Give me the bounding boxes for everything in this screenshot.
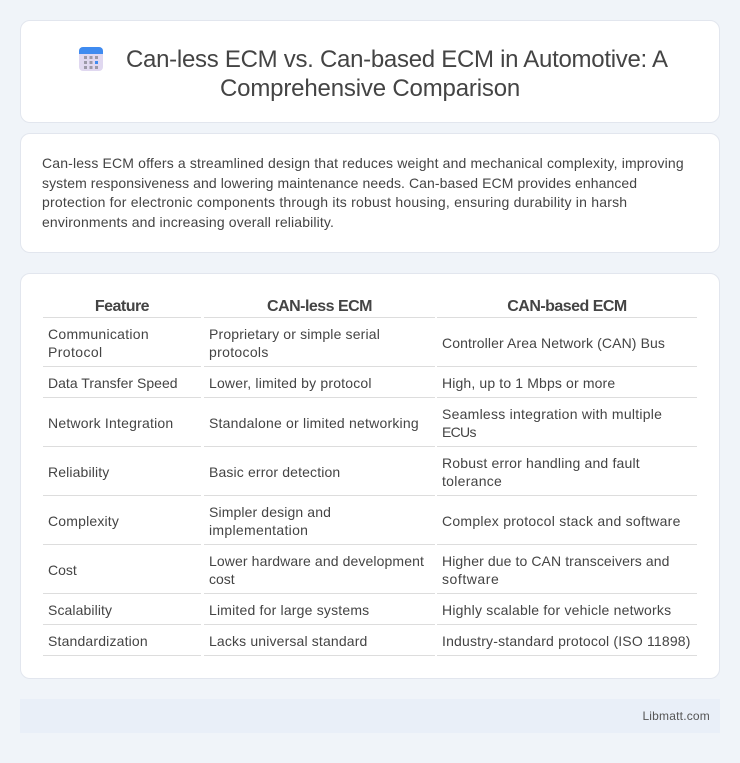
row: communication protocol: protocols xyxy=(209,344,269,360)
header card xyxy=(20,20,720,123)
row: reliability: Robust error handling and fault xyxy=(442,455,640,471)
row: standardization: Industry-standard protocol (ISO 11898) xyxy=(442,633,691,649)
row: scalability xyxy=(48,602,671,618)
row: network integration: Network Integration xyxy=(48,415,173,431)
row: scalability: Highly scalable for vehicle networks xyxy=(442,602,671,618)
footer text: Libmatt.com xyxy=(642,709,710,723)
table header: CAN-less ECM xyxy=(267,298,372,315)
table header: CAN-based ECM xyxy=(507,298,627,315)
row: scalability: Limited for large systems xyxy=(209,602,369,618)
row: scalability: Scalability xyxy=(48,602,112,618)
row: network integration: Standalone or limited networking xyxy=(209,415,419,431)
row: cost: Higher due to CAN transceivers and xyxy=(442,553,670,569)
row: reliability: Basic error detection xyxy=(209,464,340,480)
table header xyxy=(95,298,627,315)
title xyxy=(126,46,668,102)
row: communication protocol: Protocol xyxy=(48,344,103,360)
intro card xyxy=(20,133,720,253)
row: complexity: Simpler design and xyxy=(209,504,331,520)
row: standardization: Lacks universal standard xyxy=(209,633,367,649)
row: communication protocol: Proprietary or simple serial xyxy=(209,326,380,342)
intro text: environments and increasing overall reliability. xyxy=(42,214,334,230)
row: network integration: ECUs xyxy=(442,424,476,440)
row: data transfer speed xyxy=(48,375,615,391)
row: reliability xyxy=(48,455,640,489)
row: reliability: tolerance xyxy=(442,473,502,489)
row: complexity: Complexity xyxy=(48,513,119,529)
intro text: protection for electronic components through its robust housing, ensuring durability in harsh xyxy=(42,194,627,210)
title: Can-less ECM vs. Can-based ECM in Automotive: A xyxy=(126,46,668,73)
intro text: Can-less ECM offers a streamlined design that reduces weight and mechanical complexity, improving xyxy=(42,155,684,171)
row: complexity: implementation xyxy=(209,522,308,538)
row: data transfer speed: High, up to 1 Mbps or more xyxy=(442,375,615,391)
row: data transfer speed: Lower, limited by protocol xyxy=(209,375,372,391)
row: cost: cost xyxy=(209,571,235,587)
title: Comprehensive Comparison xyxy=(220,75,520,102)
icon: calendar xyxy=(79,47,103,71)
row: standardization: Standardization xyxy=(48,633,148,649)
row: cost: Cost xyxy=(48,562,77,578)
row: complexity: Complex protocol stack and software xyxy=(442,513,681,529)
row: communication protocol xyxy=(48,326,665,360)
row: data transfer speed: Data Transfer Speed xyxy=(48,375,178,391)
row: reliability: Reliability xyxy=(48,464,109,480)
intro text: system responsiveness and lowering maintenance needs. Can-based ECM provides enhanced xyxy=(42,174,637,190)
row: standardization xyxy=(48,633,691,649)
table header: Feature xyxy=(95,298,149,315)
intro text xyxy=(42,155,684,230)
row: communication protocol: Controller Area Network (CAN) Bus xyxy=(442,335,665,351)
row: cost: Lower hardware and development xyxy=(209,553,424,569)
row: cost: software xyxy=(442,571,499,587)
row: network integration: Seamless integration with multiple xyxy=(442,406,662,422)
table card xyxy=(20,273,720,679)
footer bar xyxy=(20,699,720,733)
row: communication protocol: Communication xyxy=(48,326,149,342)
row: complexity xyxy=(48,504,681,538)
row: network integration xyxy=(48,406,662,440)
row: cost xyxy=(48,553,670,587)
